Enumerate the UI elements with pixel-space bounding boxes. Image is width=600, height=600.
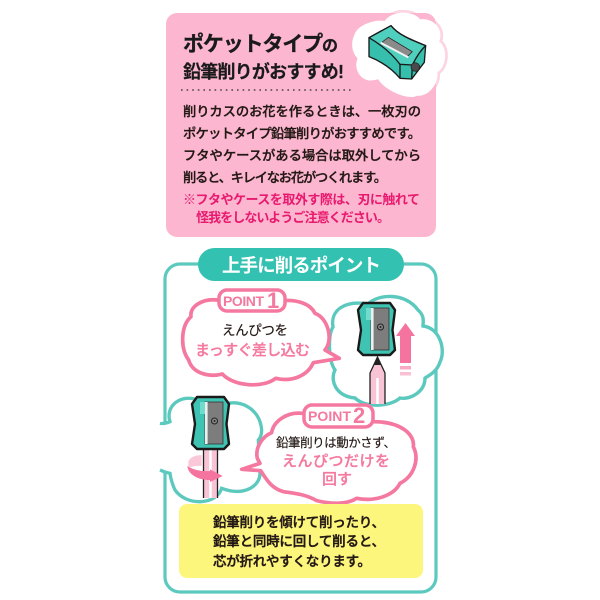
panel: yellow warning note <box>179 504 423 578</box>
pink panel background <box>166 13 436 237</box>
caution text: ※フタやケースを取外す際は、刃に触れて <box>183 192 420 207</box>
illustration: pencil rotating <box>204 450 218 498</box>
body text <box>183 104 421 185</box>
label: point 2: 2 <box>353 403 365 428</box>
text: straight in: まっすぐ差し込む <box>195 342 310 359</box>
body text: 削ると、キレイなお花がつくれます。 <box>183 169 387 185</box>
icon: pocket sharpener <box>369 26 426 79</box>
caution text: 怪我をしないようご注意ください。 <box>196 210 390 225</box>
callout: point 2 <box>242 403 416 503</box>
label: point 1 <box>219 288 285 313</box>
text: insert pencil: えんぴつを <box>222 323 288 338</box>
heading: pocket type: ポケットタイプの <box>183 33 338 56</box>
warning text <box>213 514 385 569</box>
cloud behind sharpener <box>353 13 444 96</box>
heading pill: sharpening points: 上手に削るポイント <box>222 255 381 276</box>
illustration: pencil going upward <box>370 357 385 404</box>
label: point 1: 1 <box>267 288 279 313</box>
arrow: push upward <box>396 323 415 376</box>
text: rotate: 回す <box>322 471 352 488</box>
warning text: 芯が折れやすくなります。 <box>213 553 371 569</box>
label: point 2 <box>304 403 373 428</box>
body text: フタやケースがある場合は取外してから <box>183 147 421 163</box>
cloud halo outside panel <box>353 13 444 96</box>
heading pill: sharpening points <box>198 248 404 281</box>
icon: sharpener top view 2 <box>192 397 229 449</box>
cloud: rotate pencil illustration <box>160 398 262 502</box>
cloud: straight insertion illustration <box>329 296 442 405</box>
dotted divider <box>181 89 351 91</box>
heading: recommended sharpener: 鉛筆削りがおすすめ! <box>183 61 344 82</box>
label: point 1: POINT <box>223 293 264 309</box>
label: point 2: POINT <box>308 408 351 424</box>
warning text: 鉛筆と同時に回して削ると、 <box>213 533 385 549</box>
panel: pocket type sharpener recommendation <box>166 13 444 237</box>
body text: 削りカスのお花を作るときは、一枚刃の <box>183 104 421 119</box>
body text: ポケットタイプ鉛筆削りがおすすめです。 <box>183 125 421 141</box>
icon: sharpener top view 1 <box>358 303 395 355</box>
text: turn only pencil: えんぴつだけを <box>282 453 390 470</box>
warning text: 鉛筆削りを傾けて削ったり、 <box>213 514 385 530</box>
caution text <box>183 192 420 225</box>
panel: sharpening points frame <box>165 264 436 592</box>
callout: point 1 <box>183 288 339 385</box>
arrow: rotation <box>187 455 223 482</box>
text: do not move sharpener: 鉛筆削りは動かさず、 <box>276 436 396 450</box>
